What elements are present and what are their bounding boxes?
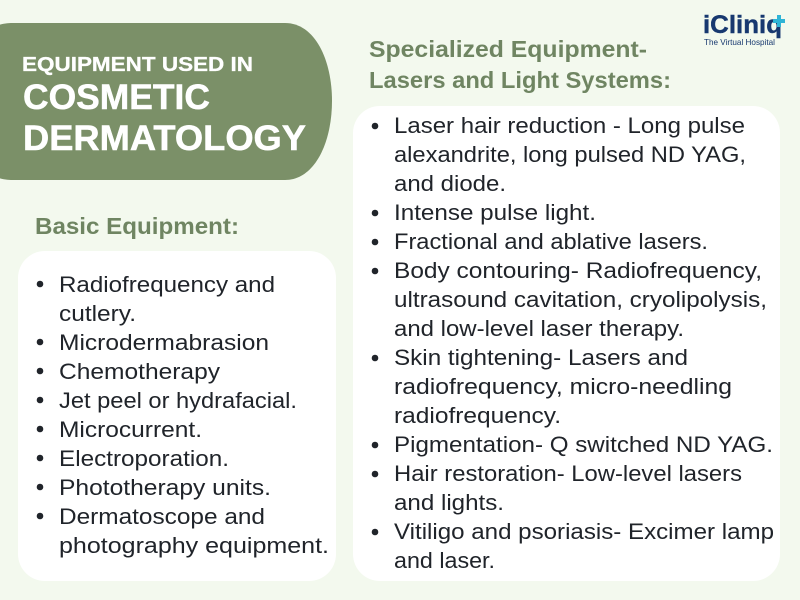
panel: lasers and light systems list: and diode. — [394, 171, 506, 196]
panel: lasers and light systems list: Fractional and ablative lasers. — [394, 229, 708, 254]
heading: basic equipment: Basic Equipment: — [35, 213, 239, 239]
panel: lasers and light systems list: and lights. — [394, 490, 504, 515]
title banner — [0, 23, 332, 180]
heading: specialized equipment: Lasers and Light Systems: — [369, 67, 671, 93]
panel: lasers and light systems list: alexandrite, long pulsed ND YAG, — [394, 142, 746, 167]
panel: basic equipment list: Jet peel or hydrafacial. — [59, 388, 297, 413]
panel: lasers and light systems list: radiofrequency. — [394, 403, 561, 428]
panel: basic equipment list — [18, 251, 336, 581]
panel: lasers and light systems list: Skin tightening- Lasers and — [394, 345, 688, 370]
panel: basic equipment list: photography equipment. — [59, 533, 329, 558]
panel: lasers and light systems list: Vitiligo and psoriasis- Excimer lamp — [394, 519, 774, 544]
panel: basic equipment list: Phototherapy units. — [59, 475, 271, 500]
panel: lasers and light systems list: Body contouring- Radiofrequency, — [394, 258, 762, 283]
panel: lasers and light systems list: Intense pulse light. — [394, 200, 596, 225]
title banner: COSMETIC — [23, 78, 210, 117]
title banner: DERMATOLOGY — [23, 119, 306, 158]
panel: basic equipment list: Microdermabrasion — [59, 330, 269, 355]
panel: basic equipment list: cutlery. — [59, 301, 136, 326]
panel: basic equipment list: Electroporation. — [59, 446, 229, 471]
panel: lasers and light systems list: and laser. — [394, 548, 495, 573]
panel: lasers and light systems list: Hair restoration- Low-level lasers — [394, 461, 742, 486]
panel: basic equipment list: Dermatoscope and — [59, 504, 265, 529]
panel: lasers and light systems list: and low-level laser therapy. — [394, 316, 684, 341]
panel: basic equipment list: Radiofrequency and — [59, 272, 275, 297]
panel: lasers and light systems list: Laser hair reduction - Long pulse — [394, 113, 745, 138]
panel: basic equipment list: Microcurrent. — [59, 417, 202, 442]
heading: specialized equipment — [369, 36, 671, 93]
logo: iCliniq: The Virtual Hospital — [704, 37, 775, 47]
title banner: EQUIPMENT USED IN — [22, 54, 253, 76]
panel: lasers and light systems list: radiofrequency, micro-needling — [394, 374, 732, 399]
panel: lasers and light systems list: Pigmentation- Q switched ND YAG. — [394, 432, 773, 457]
heading: specialized equipment: Specialized Equipment- — [369, 36, 647, 62]
panel: lasers and light systems list: ultrasound cavitation, cryolipolysis, — [394, 287, 767, 312]
panel: basic equipment list: Chemotherapy — [59, 359, 220, 384]
panel: lasers and light systems list — [353, 106, 780, 581]
logo: iCliniq: iCliniq — [703, 11, 782, 39]
